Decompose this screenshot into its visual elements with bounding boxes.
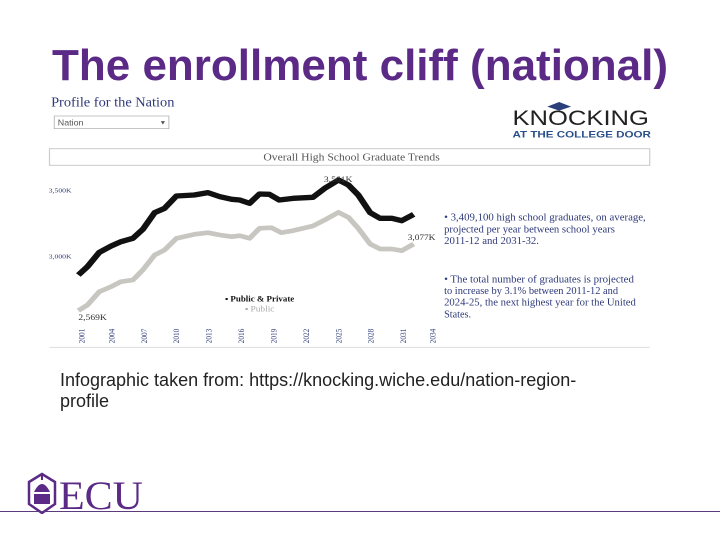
dropdown: ▼	[159, 120, 166, 126]
logo: knocking at the college door: KNOCKING	[513, 106, 649, 130]
dropdown	[54, 116, 169, 129]
x axis labels: 2022	[301, 329, 311, 343]
line: public	[78, 212, 414, 311]
bullet text	[444, 212, 646, 320]
x axis labels: 2019	[269, 329, 279, 343]
y axis labels: 3,000K	[49, 252, 72, 260]
x axis labels: 2007	[139, 329, 149, 343]
source text: Infographic taken from: https://knocking.wiche.edu/nation-region-profile	[60, 370, 576, 411]
dropdown: Nation	[58, 118, 84, 127]
heading: profile for the nation: Profile for the Nation	[51, 96, 175, 110]
x axis labels: 2025	[334, 329, 343, 343]
data labels: 3,561K	[324, 176, 352, 185]
bullet text: • The total number of graduates is projected	[444, 273, 634, 285]
x axis labels: 2013	[204, 329, 214, 343]
chart panel: profile for the nation	[48, 96, 652, 348]
bullet text: to increase by 3.1% between 2011-12 and	[444, 285, 618, 297]
x axis labels: 2031	[399, 329, 408, 343]
data labels	[78, 176, 436, 323]
bullet text: 2011-12 and 2031-32.	[444, 235, 539, 247]
title: The enrollment cliff (national)	[52, 41, 668, 90]
data labels: 3,077K	[408, 234, 436, 243]
chart title box	[49, 149, 650, 165]
logo: knocking at the college door: AT THE COLLEGE DOOR	[513, 130, 652, 140]
chart title box: Overall High School Graduate Trends	[263, 152, 440, 163]
logo: knocking at the college door	[513, 102, 652, 140]
x axis labels: 2028	[366, 329, 376, 343]
bullet text: projected per year between school years	[444, 223, 615, 235]
x axis labels: 2004	[107, 329, 116, 343]
x axis labels: 2034	[428, 329, 438, 343]
bullet text: States.	[444, 308, 471, 320]
y axis labels	[49, 186, 72, 260]
data labels: 2,569K	[78, 314, 107, 323]
x axis labels	[77, 329, 438, 343]
x axis labels: 2010	[172, 329, 181, 343]
x axis labels: 2016	[236, 329, 246, 343]
line: public & private	[78, 180, 414, 275]
legend	[225, 294, 294, 313]
legend: ▪ Public	[245, 304, 275, 313]
legend: ▪ Public & Private	[225, 294, 294, 303]
ECU logo	[28, 472, 143, 514]
x axis labels: 2001	[77, 329, 87, 343]
y axis labels: 3,500K	[49, 186, 72, 194]
